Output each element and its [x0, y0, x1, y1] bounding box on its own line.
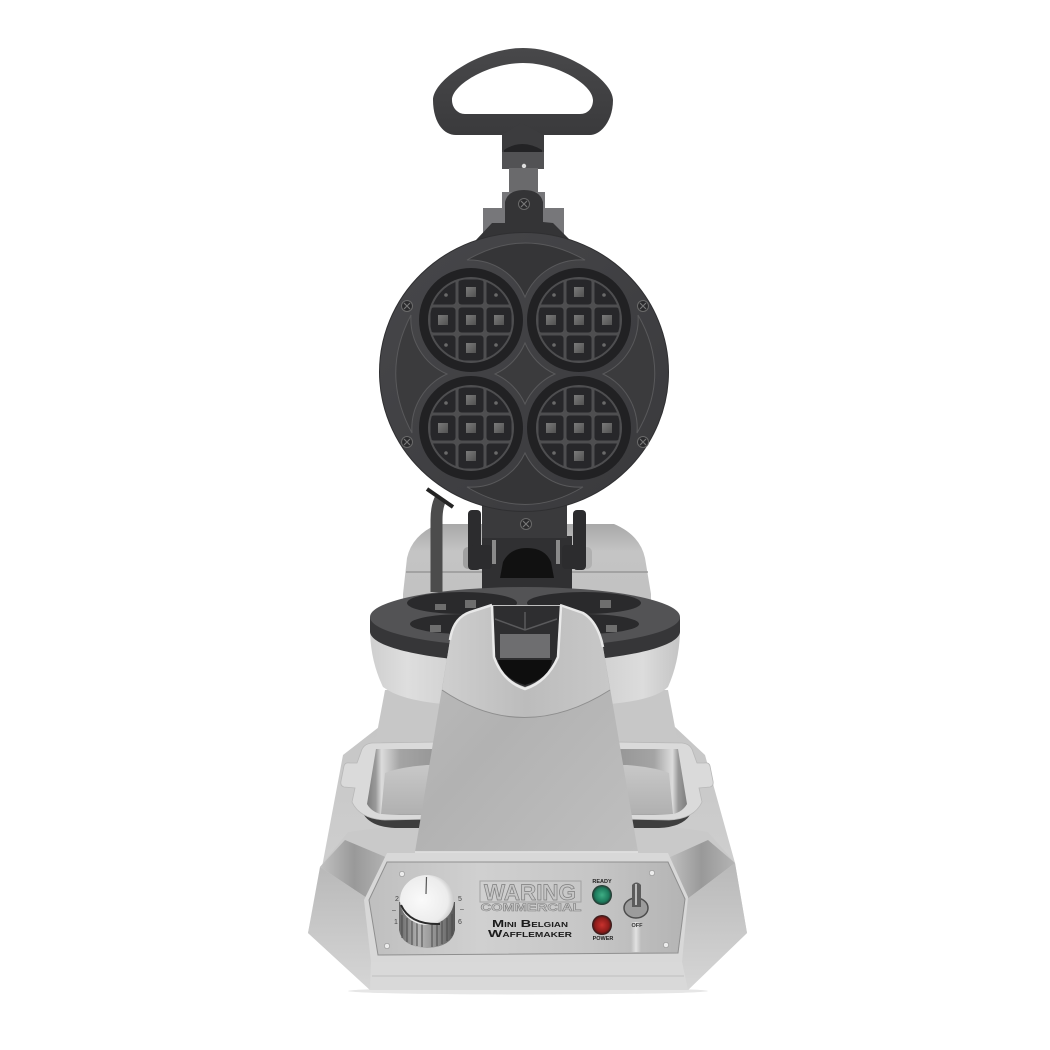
product name: Wafflemaker	[488, 928, 572, 940]
bracket plate	[483, 192, 564, 236]
temperature scale: 1	[394, 919, 398, 926]
griddle well upper right	[527, 592, 641, 614]
hinge assembly	[463, 500, 592, 590]
disc screw top left	[402, 300, 412, 312]
embossed left crescent	[396, 315, 447, 433]
temperature scale: –	[392, 907, 396, 914]
waffle well bottom right	[527, 376, 631, 480]
base	[308, 727, 747, 990]
left drip tray	[341, 742, 440, 828]
brand logo: WARING	[484, 880, 576, 905]
power indicator: POWER	[593, 936, 613, 942]
griddle handle	[433, 48, 613, 240]
right lower face	[682, 863, 747, 990]
griddle top surface	[370, 587, 680, 647]
power toggle switch: OFF	[632, 923, 643, 929]
floor shadow	[348, 988, 708, 994]
lower griddle plate	[370, 587, 680, 704]
panel surround	[364, 853, 688, 962]
rear housing	[403, 524, 651, 705]
temperature scale: –	[460, 906, 464, 913]
product name	[488, 918, 572, 940]
griddle well upper left	[407, 592, 517, 614]
left lower face	[308, 867, 371, 990]
base upper deck	[308, 727, 747, 990]
notch mechanism box	[500, 634, 550, 658]
silver side band	[370, 628, 680, 704]
embossed bottom lens	[467, 453, 583, 504]
waffle well top left	[419, 268, 523, 372]
product name: Mini Belgian	[492, 918, 568, 930]
handle loop	[433, 48, 613, 135]
dark rim band	[370, 617, 680, 663]
ready indicator	[592, 879, 612, 905]
pedestal under griddle	[376, 690, 677, 738]
right drip tray	[614, 742, 713, 828]
ready indicator: READY	[592, 879, 612, 885]
front support arm	[415, 605, 638, 852]
waffle well bottom left	[419, 376, 523, 480]
embossed top lens	[467, 243, 585, 297]
waffle griddle disc	[380, 232, 668, 512]
arm top highlight	[450, 605, 603, 647]
temperature scale: 5	[458, 896, 462, 903]
arm notch	[493, 606, 560, 687]
griddle well lower right	[527, 614, 639, 634]
notch opening	[498, 660, 552, 685]
front lip	[370, 962, 688, 990]
arm upper cowl	[442, 605, 610, 718]
handle neck	[502, 123, 544, 168]
power indicator	[592, 915, 613, 942]
brand logo: COMMERCIAL	[480, 902, 582, 914]
disc screw top right	[638, 300, 648, 312]
left corner facet	[320, 840, 388, 900]
bracket cap	[476, 190, 570, 240]
waffle well top right	[527, 268, 631, 372]
disc screw bottom left	[402, 436, 412, 448]
griddle well lower left	[410, 614, 522, 634]
control panel	[369, 862, 685, 955]
temperature scale	[392, 896, 464, 926]
right corner facet	[668, 840, 735, 900]
embossed centre diamond	[495, 343, 555, 404]
griddle pegs	[430, 600, 617, 632]
temperature scale: 2	[395, 896, 399, 903]
panel plate	[369, 862, 685, 955]
hinge opening	[500, 548, 554, 578]
disc screw bottom right	[638, 436, 648, 448]
power cable	[427, 489, 453, 592]
temperature scale: 6	[458, 919, 462, 926]
brand logo	[480, 880, 582, 914]
temperature knob	[399, 875, 455, 948]
embossed right crescent	[603, 315, 655, 433]
product illustration: waffle maker	[308, 48, 747, 994]
power toggle switch	[624, 882, 648, 952]
panel rivets	[384, 870, 669, 949]
bracket stem	[509, 168, 538, 194]
